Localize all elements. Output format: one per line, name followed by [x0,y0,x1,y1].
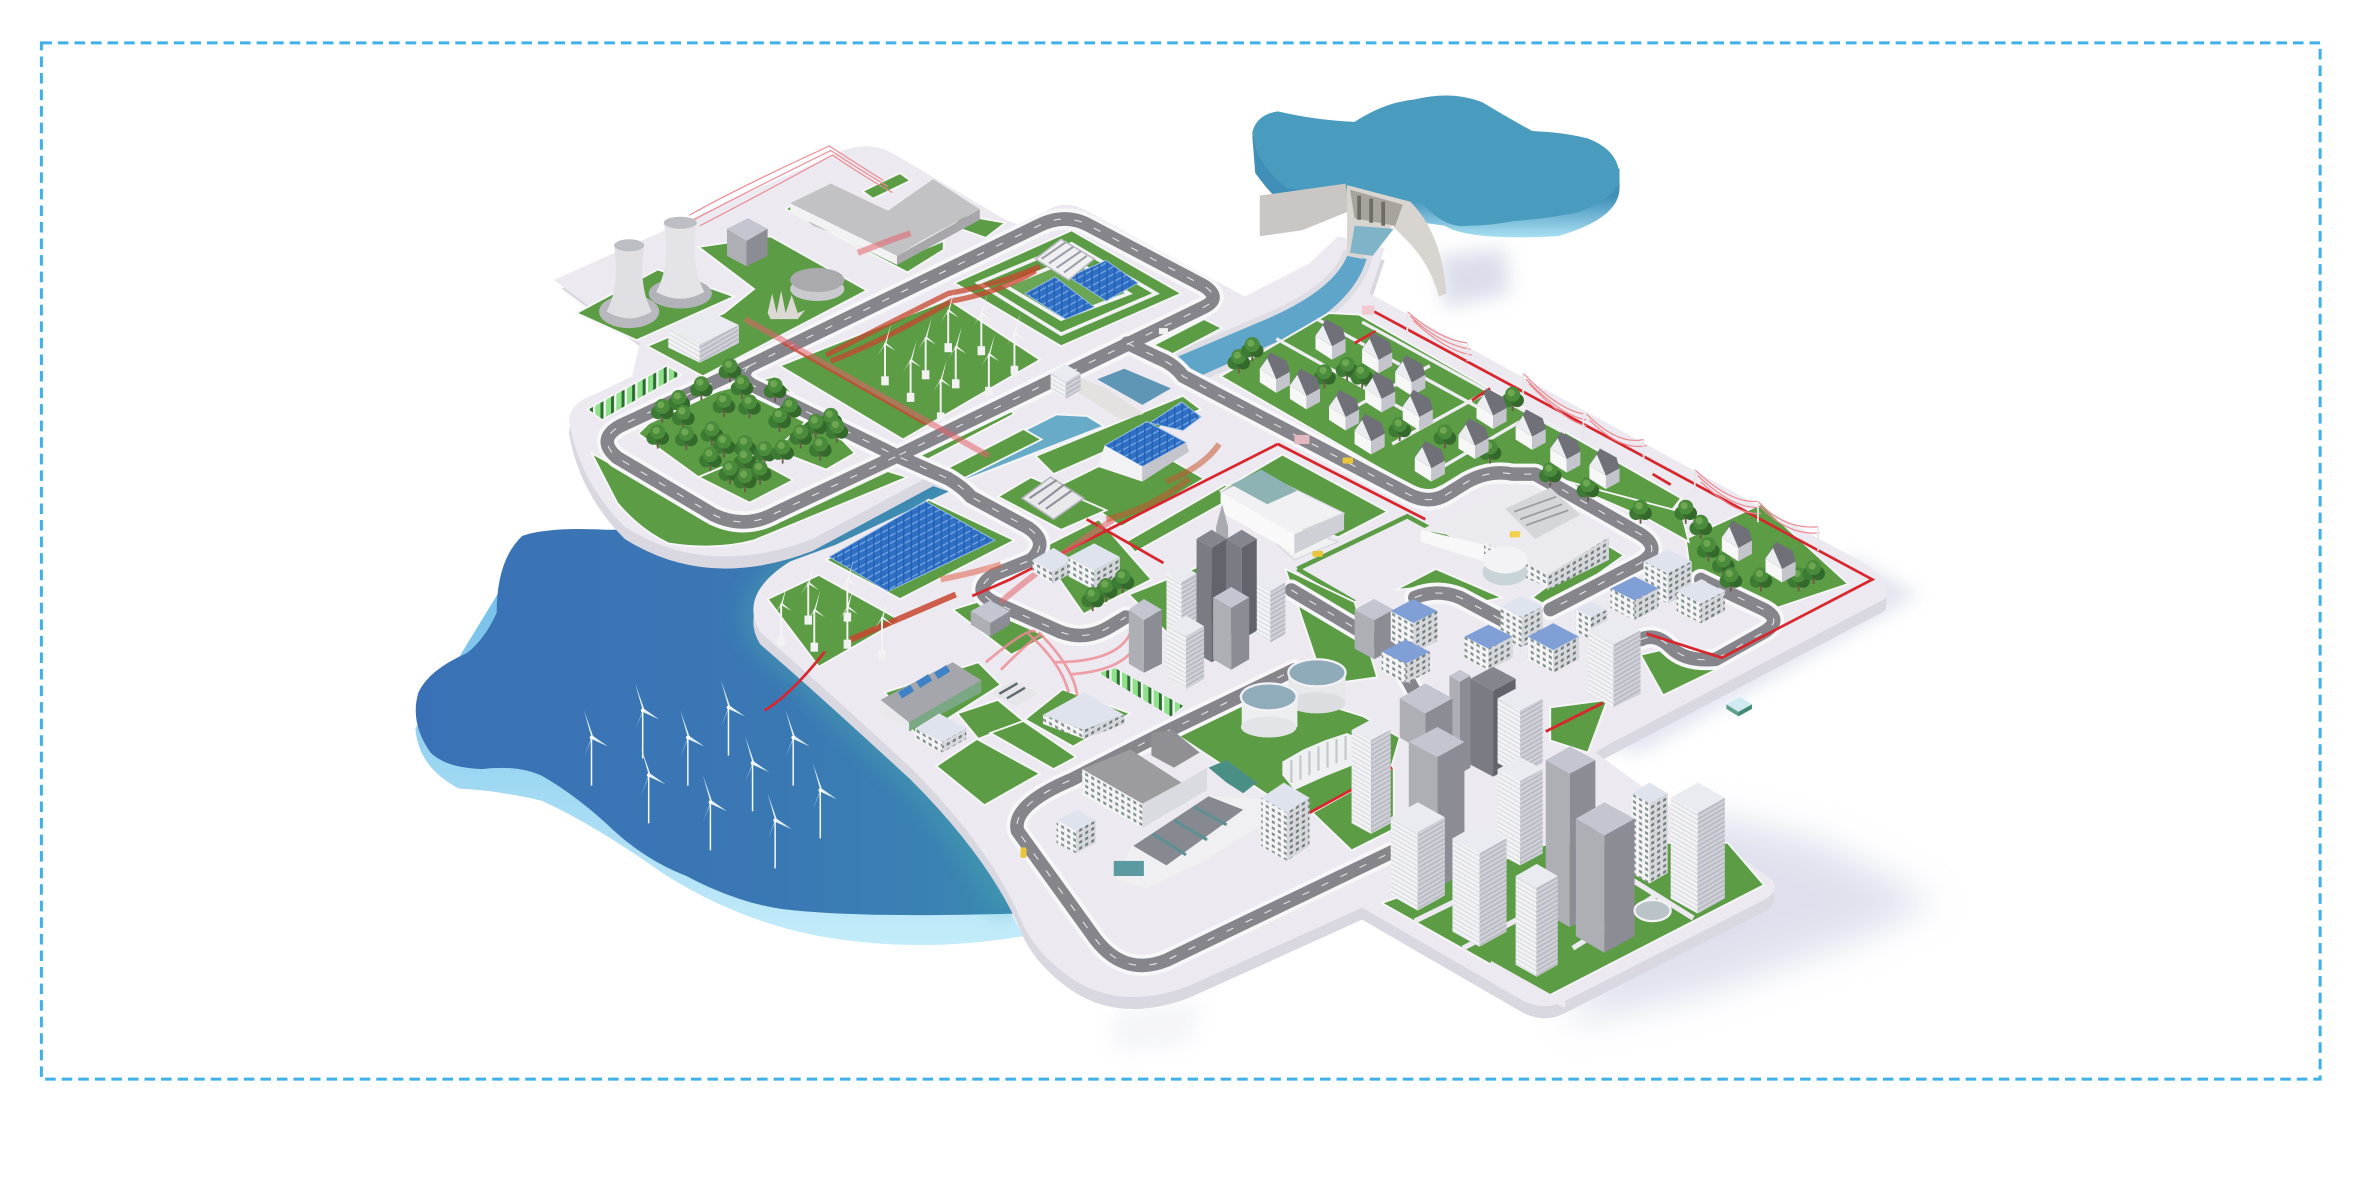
land platform thickness [554,158,1887,1018]
white laboratory building [1221,470,1344,560]
cooling tower right [649,217,712,309]
floating sensor icon [1726,697,1752,716]
parking cars [1020,306,1520,858]
upper lake and reservoir [1252,95,1619,237]
coastal sheds row [880,662,1124,753]
canal and basin [948,369,1171,479]
silo array [1282,733,1364,790]
suburban houses [1227,319,1825,592]
land platform surface [554,146,1887,1006]
central dark towers and neighbours [1129,504,1285,689]
reactor hall [668,310,739,363]
round tank [790,268,844,301]
residential footpaths [1276,319,1565,473]
downtown plaza paths [1415,880,1693,1005]
cooling tower left [599,239,659,328]
boiler building [727,218,768,266]
river dam and pump station [1051,364,1144,420]
onshore wind turbines [774,290,1025,659]
cover under the power station corner [527,283,647,409]
sea with offshore platform edge [415,479,1023,945]
factory complex [1057,730,1364,888]
offices near solar field [971,543,1134,637]
overhead high-voltage lines [689,146,1820,700]
road network [607,219,1774,965]
solar arrays [829,260,1201,592]
underground power cables [765,312,1872,813]
main hall with rotunda [1421,483,1609,590]
dam [1260,184,1446,297]
chimneys [768,290,805,319]
circular water tanks [1241,659,1346,738]
sawtooth shed [1115,796,1261,888]
downtown skyscraper cluster [1352,667,1725,977]
mid-rise office cluster [1355,549,1725,707]
river from the dam [1174,256,1367,376]
hydrogen tower [1261,783,1309,861]
park trees [646,358,848,492]
factory roof and hall [790,179,980,265]
small office [1057,810,1096,853]
power station block [599,179,980,363]
soft ground shadows [1114,248,1934,1054]
offshore wind turbines [584,680,837,868]
substation and solar farm buildings [1022,239,1189,519]
green land blocks [576,173,1848,1005]
